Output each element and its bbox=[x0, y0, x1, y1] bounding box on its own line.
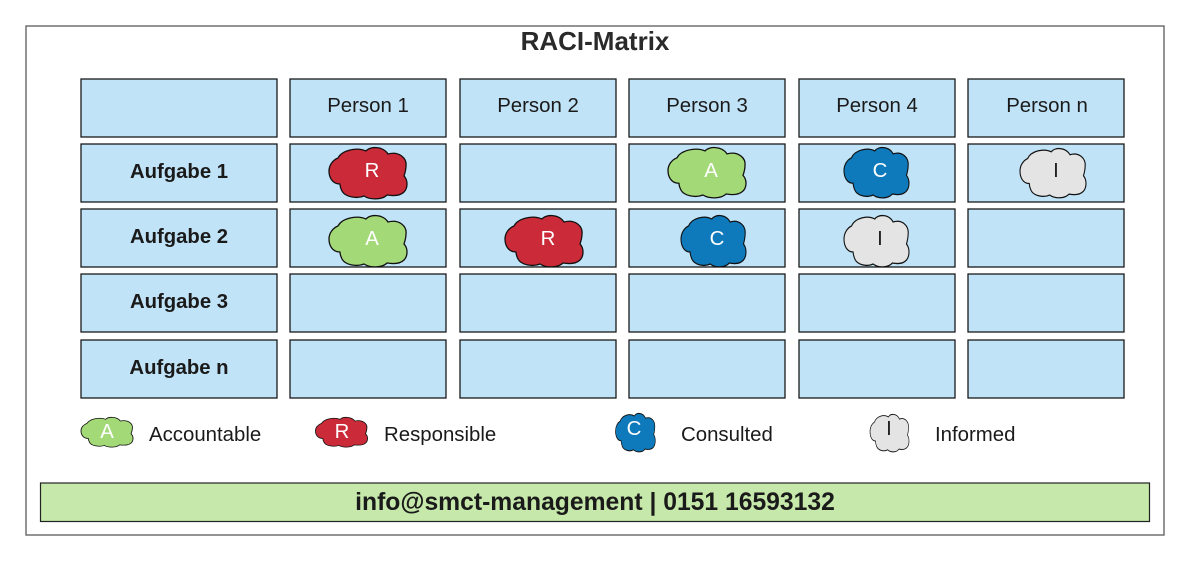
cloud: Person 3 Aufgabe 1 A bbox=[668, 148, 746, 198]
header row: Person 1 bbox=[327, 95, 409, 117]
row: Aufgabe n bbox=[81, 340, 1124, 398]
legend: Consulted bbox=[616, 413, 773, 452]
legend: Informed bbox=[870, 414, 1015, 452]
contact footer bar: info@smct-management | 0151 16593132 bbox=[355, 489, 835, 516]
cloud: Person n Aufgabe 1 I: I bbox=[1053, 160, 1059, 182]
header row: Person 3 bbox=[666, 95, 748, 117]
legend: Responsible bbox=[316, 417, 496, 447]
header row bbox=[81, 79, 1124, 137]
cloud: Person 1 Aufgabe 2 A: A bbox=[365, 228, 379, 250]
cloud: Person 4 Aufgabe 2 I bbox=[844, 216, 909, 267]
legend: Accountable: Accountable bbox=[149, 424, 261, 446]
legend: Informed: I bbox=[886, 418, 892, 440]
header row: Person 2 bbox=[497, 95, 579, 117]
legend: Informed: Informed bbox=[935, 424, 1015, 446]
matrix table bbox=[81, 79, 1124, 398]
cloud: Person 4 Aufgabe 2 I: I bbox=[877, 228, 883, 250]
row: Aufgabe 2 bbox=[81, 209, 1124, 267]
cloud: Person 2 Aufgabe 2 R bbox=[505, 216, 583, 267]
legend: Responsible: Responsible bbox=[384, 424, 496, 446]
row: Aufgabe 2: Aufgabe 2 bbox=[130, 226, 228, 248]
contact footer bar bbox=[40, 483, 1150, 522]
row: Aufgabe 3 bbox=[81, 274, 1124, 332]
row: Aufgabe 1 bbox=[81, 144, 1124, 202]
header row: Person 4 bbox=[836, 95, 918, 117]
cloud: Person 1 Aufgabe 1 R bbox=[329, 148, 407, 199]
cloud: Person 2 Aufgabe 2 R: R bbox=[541, 228, 555, 250]
header row: Person n bbox=[1006, 95, 1088, 117]
cloud: Person 3 Aufgabe 2 C: C bbox=[710, 228, 724, 250]
cloud: Person 4 Aufgabe 1 C: C bbox=[873, 160, 887, 182]
legend bbox=[81, 413, 1015, 452]
legend: Responsible: R bbox=[335, 421, 349, 443]
row: Aufgabe 1: Aufgabe 1 bbox=[130, 161, 228, 183]
cloud: Person n Aufgabe 1 I bbox=[1020, 149, 1086, 198]
row: Aufgabe n: Aufgabe n bbox=[129, 357, 229, 379]
cloud: Person 1 Aufgabe 1 R: R bbox=[365, 160, 379, 182]
cloud: Person 1 Aufgabe 2 A bbox=[329, 216, 407, 267]
legend: Accountable bbox=[81, 417, 261, 447]
cloud: Person 3 Aufgabe 1 A: A bbox=[704, 160, 718, 182]
legend: Accountable: A bbox=[100, 421, 114, 443]
title: RACI-Matrix bbox=[521, 26, 670, 56]
legend: Consulted: Consulted bbox=[681, 424, 773, 446]
row: Aufgabe 3: Aufgabe 3 bbox=[130, 291, 228, 313]
legend: Consulted: C bbox=[627, 418, 641, 440]
cloud: Person 4 Aufgabe 1 C bbox=[844, 148, 909, 198]
cloud: Person 3 Aufgabe 2 C bbox=[681, 216, 746, 267]
